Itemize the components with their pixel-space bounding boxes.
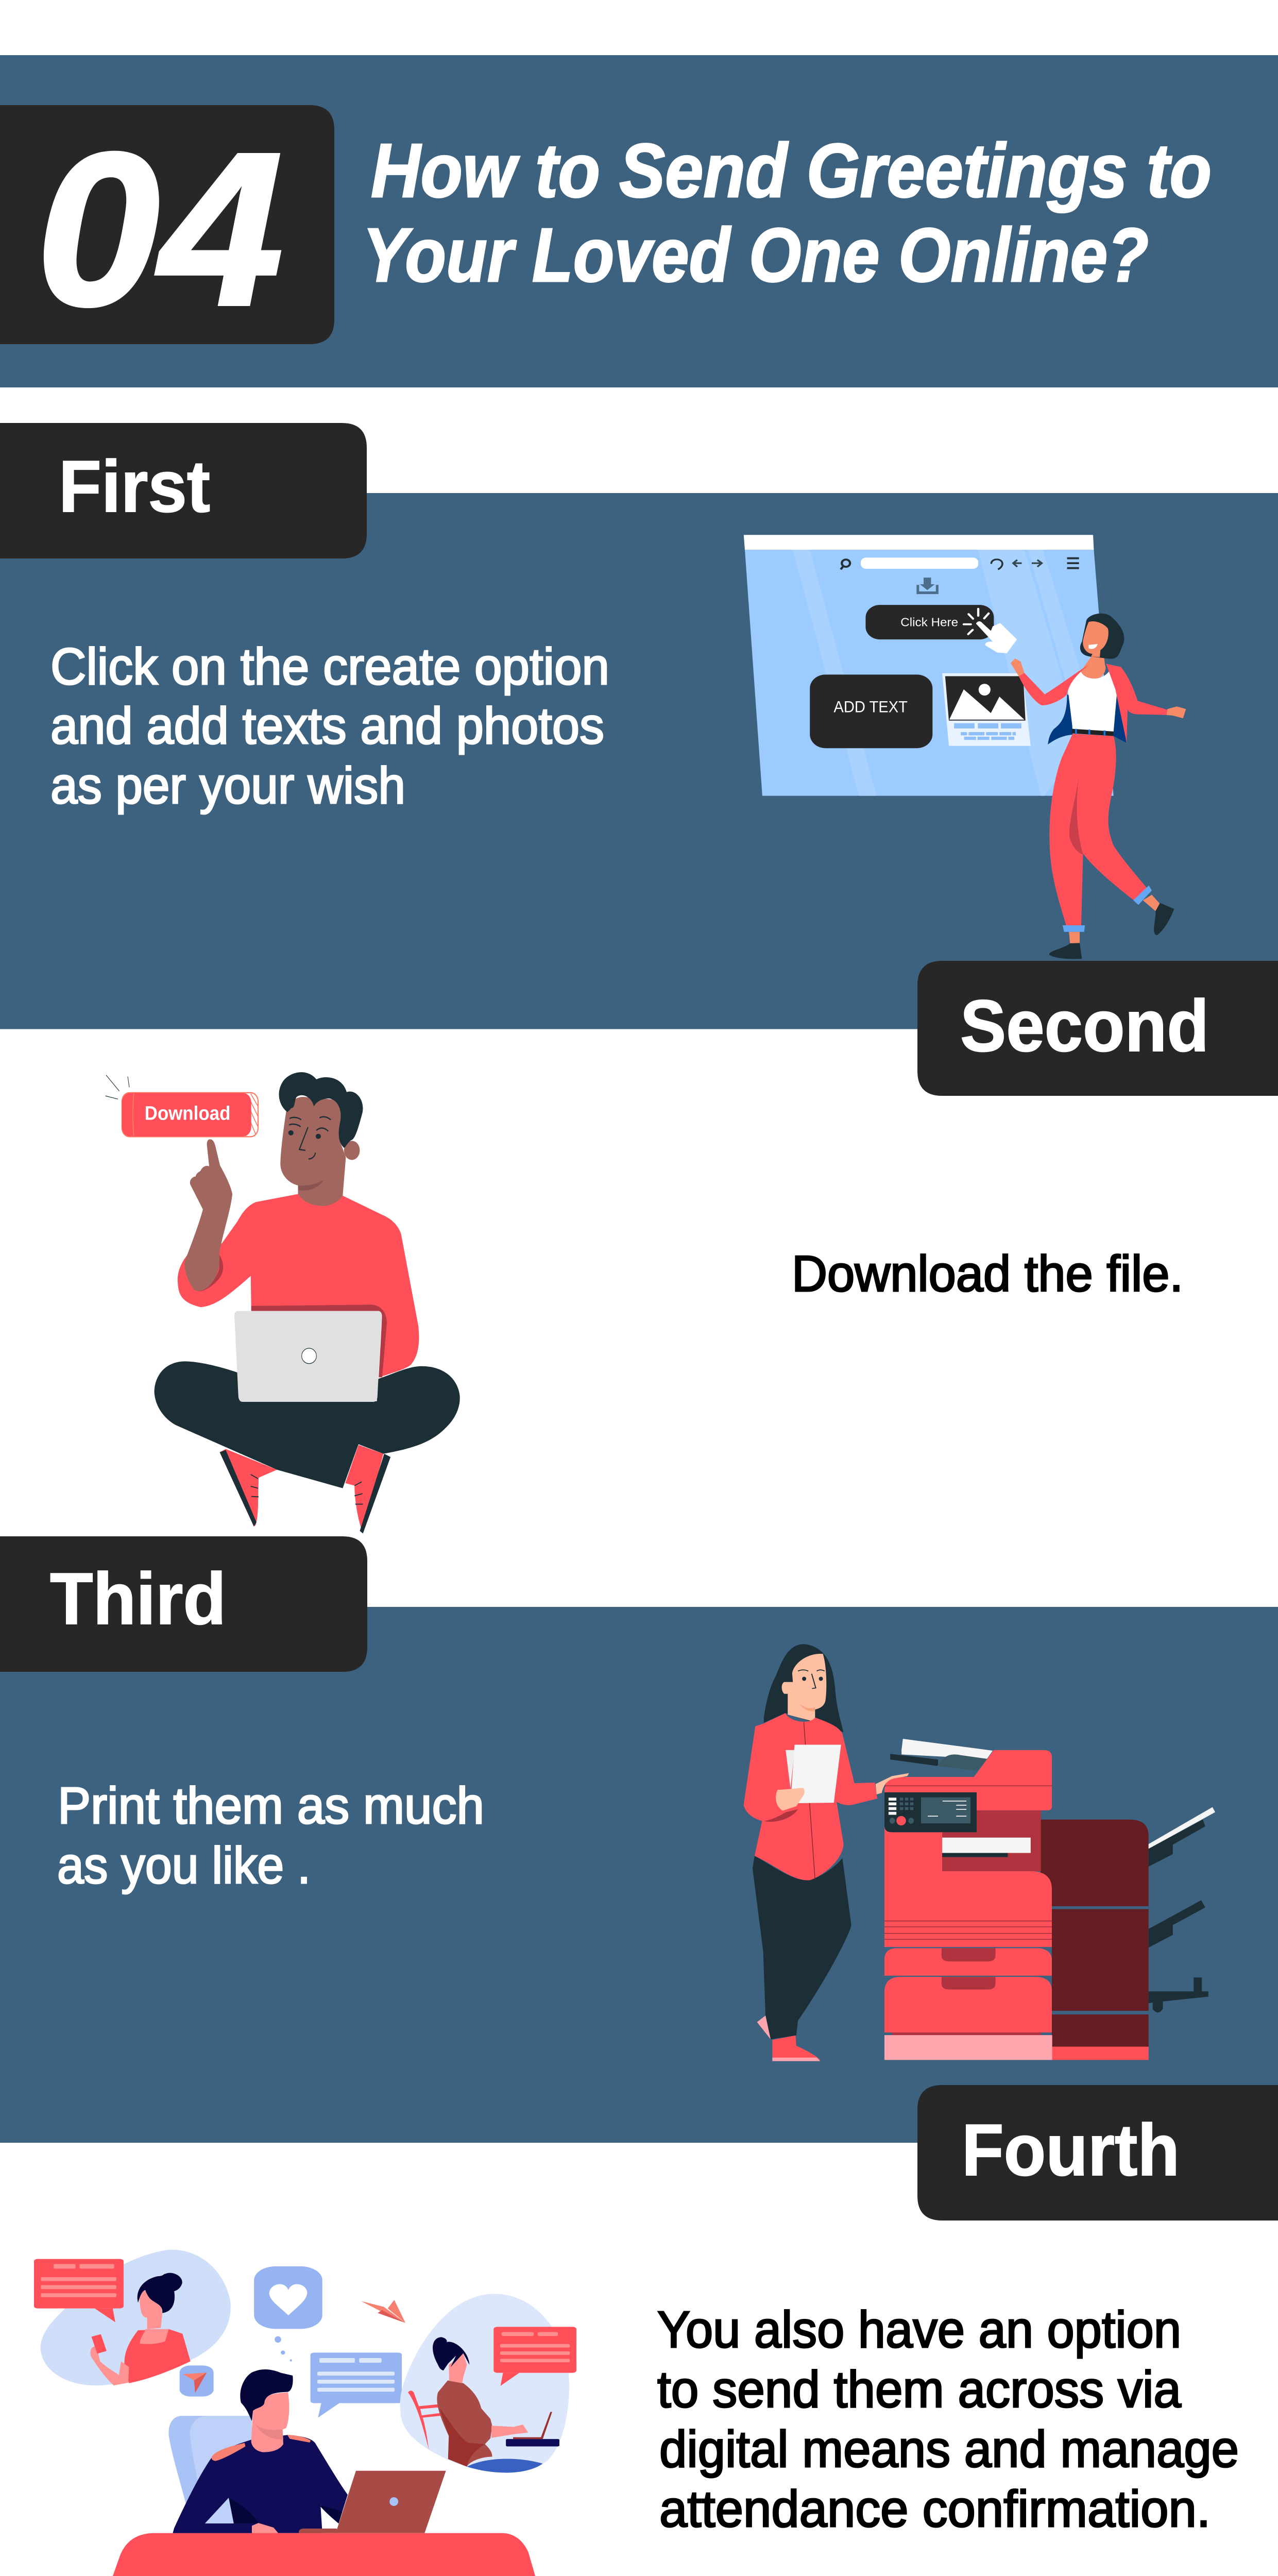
woman holding papers — [744, 1644, 909, 2061]
illustration: woman at printer — [744, 1644, 1215, 2061]
header band — [0, 55, 1278, 387]
step label: Fourth — [917, 2085, 1278, 2221]
first step text — [50, 638, 609, 815]
fourth step text: attendance confirmation. — [659, 2480, 1211, 2538]
fourth step text: You also have an option — [657, 2301, 1181, 2359]
download button: Download — [145, 1103, 230, 1124]
step label: Second: Second — [960, 985, 1209, 1067]
step label: Second — [917, 961, 1278, 1096]
icon: send bubble — [180, 2365, 214, 2397]
laptop — [234, 1304, 387, 1402]
second step text: Download the file. — [792, 1245, 1183, 1302]
first step text: as per your wish — [50, 757, 405, 815]
title — [363, 128, 1212, 298]
illustration: woman and browser window — [744, 535, 1186, 959]
red message bubble — [34, 2259, 124, 2322]
add text button — [810, 674, 932, 748]
illustration: people chatting online — [34, 2250, 576, 2576]
right contact bubble — [400, 2294, 576, 2472]
step label: Fourth: Fourth — [962, 2109, 1180, 2191]
crossed legs and shoes — [154, 1361, 460, 1533]
third step text: as you like . — [57, 1837, 311, 1894]
third step text — [57, 1777, 484, 1894]
man at desk with laptop — [110, 2369, 537, 2576]
woman walking — [1011, 614, 1186, 959]
add text button: ADD TEXT — [833, 698, 908, 716]
image card — [942, 673, 1031, 746]
browser window — [744, 535, 1114, 796]
step label: First: First — [59, 446, 210, 528]
man — [178, 1072, 419, 1377]
download button — [106, 1075, 258, 1137]
third step text: Print them as much — [58, 1777, 484, 1835]
illustration: man with laptop and download button — [106, 1072, 460, 1533]
blue message bubble — [311, 2352, 402, 2418]
number badge: 04 — [36, 107, 283, 351]
title: How to Send Greetings to — [371, 128, 1212, 213]
printer — [884, 1739, 1215, 2060]
fourth step text: digital means and manage — [659, 2420, 1239, 2478]
panel: first step — [0, 423, 1278, 1029]
title: Your Loved One Online? — [363, 213, 1149, 298]
fourth step text — [657, 2301, 1239, 2538]
panel: third step — [0, 1536, 1278, 2143]
step label: Third — [0, 1536, 367, 1672]
step label: First — [0, 423, 367, 558]
click here button: Click Here — [900, 616, 958, 629]
icon: heart bubble — [254, 2266, 322, 2362]
first step text: and add texts and photos — [50, 697, 604, 755]
click here button — [865, 605, 1017, 653]
fourth step text: to send them across via — [657, 2361, 1181, 2418]
icon: paper plane — [361, 2300, 405, 2323]
left contact bubble — [41, 2250, 231, 2385]
step label: Third: Third — [50, 1558, 226, 1640]
first step text: Click on the create option — [50, 638, 609, 696]
